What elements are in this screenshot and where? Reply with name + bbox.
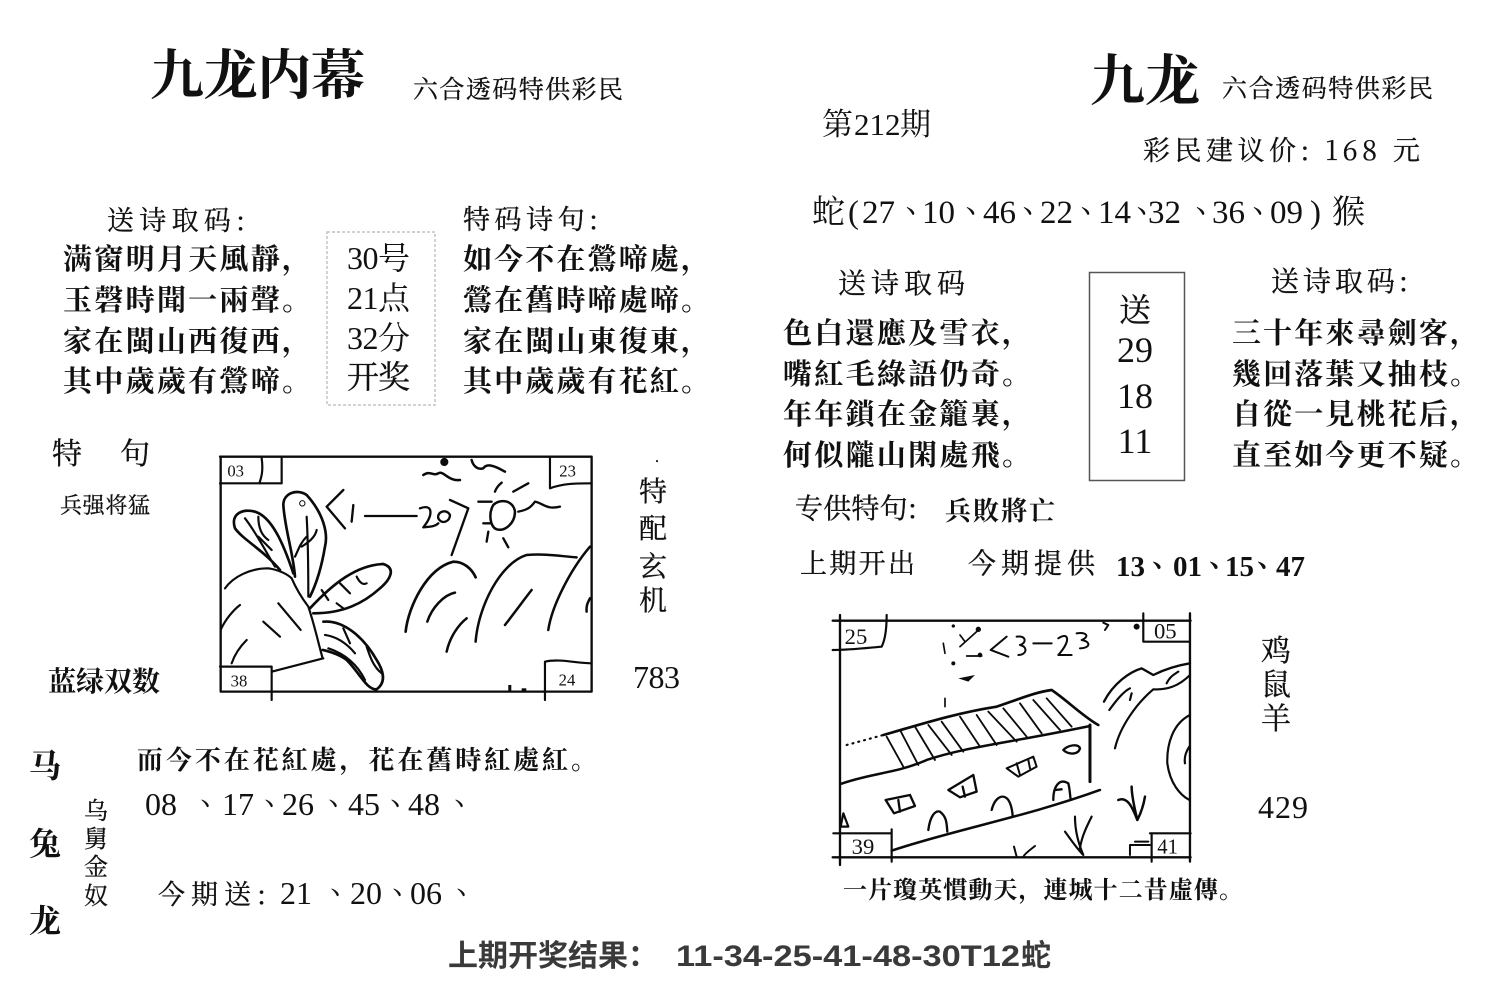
- poem: left column two: 鶯在舊時啼處啼。: [463, 283, 710, 317]
- numbers: this issue offer: 47: [1276, 551, 1305, 583]
- corner numbers: sketch one: 23: [559, 462, 576, 481]
- text: vertical four characters: 奴: [84, 883, 108, 910]
- poem: right column one: 色白還應及雪衣，: [783, 317, 1031, 350]
- numbers: snake to monkey row: 46: [983, 195, 1016, 231]
- numbers: left list: 45: [348, 786, 380, 822]
- numbers: left list: 、: [190, 786, 222, 822]
- text: vertical special mystery: [639, 449, 667, 617]
- poem: left column one: 家在閩山西復西，: [63, 325, 311, 358]
- text: vertical special mystery: 机: [639, 585, 667, 617]
- poem: left column one: 玉磬時聞一兩聲。: [63, 284, 311, 317]
- text: vertical four characters: [84, 798, 108, 910]
- text: vertical four characters: 乌: [84, 798, 108, 825]
- panel: left sheet: [29, 33, 710, 939]
- poem: right column one: 年年鎖在金籠裏，: [783, 398, 1031, 431]
- numbers: this issue gift: 今期送:: [158, 873, 266, 912]
- callout: gift numbers box: 11: [1118, 421, 1152, 461]
- corner numbers: sketch one: 38: [231, 672, 247, 691]
- text: vertical special mystery: 特: [639, 476, 667, 508]
- poem line: left bottom: 而今不在花紅處，花在舊時紅處紅。: [137, 740, 597, 777]
- callout: gift numbers box: 29: [1117, 330, 1153, 370]
- poem: left column one: 其中歲歲有鶯啼。: [63, 365, 311, 398]
- numbers: snake to monkey row: ): [1310, 195, 1321, 231]
- callout: draw time box: 21点: [347, 280, 411, 316]
- text: strong soldiers phrase: 兵强将猛: [60, 489, 150, 520]
- numbers: this issue gift: 21: [280, 875, 312, 911]
- footer: last draw result: 上期开奖结果：: [448, 940, 658, 973]
- issue number: 第: [822, 107, 853, 142]
- callout: gift numbers box: 18: [1117, 376, 1153, 416]
- numbers: left list: 、: [444, 786, 476, 822]
- corner numbers: sketch two: 25: [845, 624, 867, 649]
- number: 429: 429: [1258, 789, 1308, 825]
- numbers: snake to monkey row: 09: [1270, 195, 1303, 231]
- numbers: this issue gift: 06: [410, 875, 442, 911]
- corner numbers: sketch one: 24: [559, 670, 576, 689]
- text: vertical special mystery: 玄: [639, 551, 667, 583]
- heading: poem code right one: 送诗取码: [838, 262, 965, 302]
- panel: right sheet: [783, 37, 1479, 905]
- numbers: snake to monkey row: 14: [1098, 195, 1131, 231]
- subtitle: left: 六合透码特供彩民: [413, 70, 623, 106]
- callout: draw time box: [327, 232, 435, 405]
- poem: left column two: 家在閩山東復東，: [463, 325, 710, 358]
- poem: right column one: 何似隴山閑處飛。: [783, 439, 1031, 472]
- poem: right column two: 幾回落葉又抽枝。: [1232, 358, 1479, 391]
- numbers: snake to monkey row: 、: [895, 195, 928, 231]
- heading: poem code right two: 送诗取码:: [1271, 260, 1408, 300]
- numbers: this issue offer: [1116, 551, 1305, 583]
- numbers: left list: 48: [408, 786, 440, 822]
- numbers: snake to monkey row: 、: [1126, 195, 1159, 231]
- corner numbers: sketch one: 03: [227, 462, 244, 481]
- issue number: [822, 107, 931, 142]
- numbers: this issue offer: 13: [1116, 551, 1145, 583]
- text: vertical special mystery: .: [655, 449, 659, 466]
- numbers: snake to monkey row: 猴: [1332, 195, 1365, 231]
- corner numbers: sketch one: [227, 462, 576, 691]
- text: vertical four characters: 金: [84, 854, 108, 881]
- corner numbers: sketch two: 05: [1154, 618, 1177, 643]
- numbers: this issue offer: 、: [1143, 551, 1172, 583]
- text: last issue clipped label: 上期开出: [800, 542, 915, 581]
- poem: left column two: 其中歲歲有花紅。: [463, 365, 710, 398]
- numbers: snake to monkey row: [812, 194, 1365, 231]
- heading: poem code left: 送诗取码:: [107, 199, 245, 238]
- callout: draw time box: 32分: [347, 320, 410, 356]
- numbers: this issue gift: 、: [382, 875, 414, 911]
- numbers: left list: 08: [145, 786, 177, 822]
- poem line: right bottom: 一片瓊英慣動天，連城十二昔虛傳。: [843, 870, 1243, 905]
- numbers: snake to monkey row: 、: [955, 195, 988, 231]
- text: vertical four characters: 舅: [84, 826, 108, 853]
- numbers: this issue offer: 15: [1225, 551, 1254, 583]
- numbers: snake to monkey row: 36: [1212, 195, 1245, 231]
- label: special phrase: 特 句: [52, 429, 150, 473]
- footer: last draw result: 11-34-25-41-48-30T12: [676, 940, 1020, 973]
- text: blue green even: 蓝绿双数: [48, 660, 160, 700]
- footer: last draw result: 蛇: [1021, 940, 1051, 973]
- zodiac list: rooster rat goat: 鼠: [1261, 669, 1291, 702]
- numbers: snake to monkey row: 、: [1185, 195, 1218, 231]
- numbers: this issue gift: 20: [350, 875, 382, 911]
- poem: right column one: 嘴紅毛綠語仍奇。: [783, 358, 1031, 391]
- numbers: this issue offer: 、: [1248, 551, 1277, 583]
- numbers: snake to monkey row: 蛇: [812, 194, 845, 231]
- numbers: snake to monkey row: 、: [1070, 195, 1103, 231]
- subtitle: right: 六合透码特供彩民: [1222, 69, 1433, 105]
- poem: left column one: [63, 243, 311, 398]
- poem: left column two: [463, 243, 710, 398]
- numbers: snake to monkey row: 27: [862, 195, 895, 231]
- footer: last draw result: [448, 940, 1051, 973]
- callout: draw time box: 开奖: [347, 352, 410, 398]
- poem: left column two: 如今不在鶯啼處，: [463, 243, 710, 276]
- poem: right column two: 三十年來尋劍客，: [1232, 317, 1479, 350]
- title: left: 九龙内幕: [150, 33, 365, 110]
- text: vertical special mystery: 配: [639, 514, 667, 545]
- numbers: snake to monkey row: 、: [1242, 195, 1275, 231]
- numbers: snake to monkey row: 10: [922, 195, 955, 231]
- numbers: left list: 、: [254, 786, 286, 822]
- zodiac list: rooster rat goat: [1261, 635, 1291, 736]
- text: special phrase right: 专供特句:: [795, 487, 917, 527]
- numbers: left list: 26: [282, 786, 314, 822]
- poem: right column one: [783, 317, 1031, 472]
- poem: right column two: [1232, 317, 1479, 472]
- text: this issue offer: 今期提供: [968, 542, 1096, 582]
- numbers: snake to monkey row: 22: [1040, 195, 1073, 231]
- illustration: house sketch: [833, 613, 1191, 865]
- title: right: 九龙: [1090, 37, 1200, 116]
- numbers: left list: 、: [380, 786, 412, 822]
- zodiac list: rooster rat goat: 鸡: [1261, 635, 1291, 668]
- poem: right column two: 自從一見桃花后，: [1232, 398, 1479, 431]
- numbers: left list: 、: [318, 786, 350, 822]
- numbers: this issue gift: 、: [320, 875, 352, 911]
- corner numbers: sketch two: 41: [1157, 836, 1178, 858]
- numbers: left list: 17: [222, 786, 254, 822]
- text: defeated soldiers phrase: 兵敗將亡: [945, 491, 1055, 528]
- zodiac list: vertical: 兔: [29, 826, 61, 862]
- corner numbers: sketch two: [845, 618, 1178, 859]
- heading: special code poem: 特码诗句:: [463, 198, 598, 237]
- callout: gift numbers box: 送: [1119, 285, 1151, 331]
- numbers: this issue gift: [158, 873, 478, 912]
- callout: draw time box: 30号: [347, 240, 410, 276]
- issue number: 212: [854, 107, 900, 142]
- price: 彩民建议价: 168 元: [1143, 129, 1420, 168]
- zodiac list: vertical: 马: [29, 748, 61, 784]
- numbers: this issue gift: 、: [446, 875, 478, 911]
- poem: right column two: 直至如今更不疑。: [1232, 439, 1479, 472]
- numbers: left list: [145, 786, 476, 822]
- zodiac list: vertical: [29, 748, 61, 939]
- zodiac list: vertical: 龙: [29, 903, 61, 939]
- numbers: snake to monkey row: 32: [1148, 195, 1181, 231]
- illustration: plant and sun sketch: [220, 457, 592, 700]
- numbers: snake to monkey row: 、: [1012, 195, 1045, 231]
- number: 783: 783: [633, 659, 680, 695]
- numbers: snake to monkey row: (: [848, 195, 859, 231]
- zodiac list: rooster rat goat: 羊: [1261, 703, 1291, 736]
- poem: left column one: 满窗明月天風靜，: [63, 243, 311, 276]
- numbers: this issue offer: 、: [1200, 551, 1229, 583]
- numbers: this issue offer: 01: [1173, 551, 1202, 583]
- corner numbers: sketch two: 39: [852, 834, 874, 859]
- issue number: 期: [900, 107, 931, 142]
- callout: gift numbers box: [1090, 272, 1184, 480]
